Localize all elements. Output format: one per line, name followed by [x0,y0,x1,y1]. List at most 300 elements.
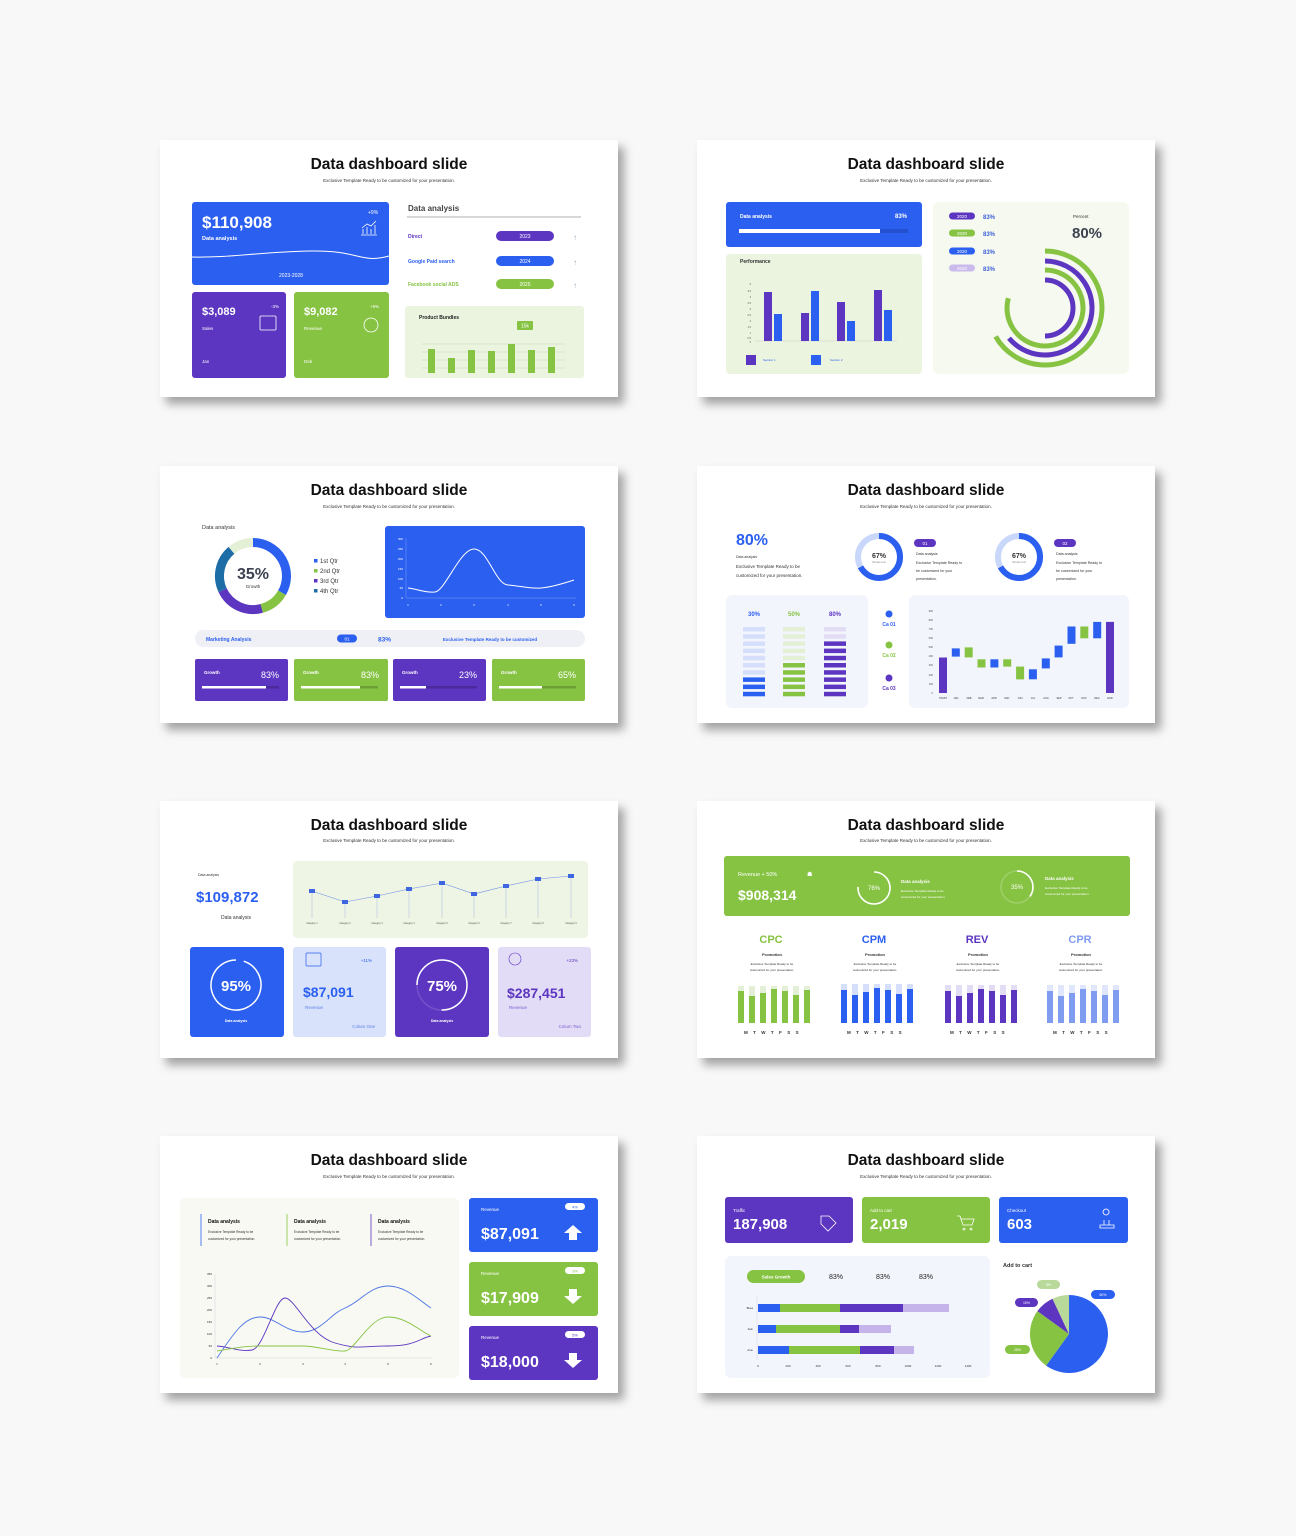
title: Data dashboard slide [848,817,1005,834]
card: traffic: 187,908 [733,1216,787,1233]
title: Exclusive Template Ready to be customized for your presentation. [323,178,455,183]
line chart panel: Category 6 [468,922,480,925]
waterfall chart: 800 [929,618,934,622]
donut 01: 67% [872,553,887,560]
waterfall chart: START [939,697,947,700]
donut 02: 67% [1012,553,1027,560]
panel: multi-line chart: 0 [210,1356,212,1360]
title: Data dashboard slide [311,482,468,499]
panel: performance bar chart: 2 [750,320,752,323]
column: CPR: MTWTFSS [1053,1030,1113,1035]
card: data analysis progress: Data analysis [740,214,772,220]
line chart panel: 200 [398,557,403,561]
card: $87,091: Revenue [305,1005,324,1010]
column: CPC: Exclusive Template Ready to be [751,962,794,966]
card: $87,091 [293,947,386,1037]
waterfall chart: AUG [1043,697,1049,700]
column: REV: MTWTFSS [950,1030,1010,1035]
card: sales: Jan [202,359,210,364]
growth cards: 23% [459,670,477,680]
card: revenue down purple: 5% [572,1332,578,1338]
data analysis list: Facebook social ADS [408,282,459,288]
panel: product bundles chart [405,306,584,378]
waterfall chart: SEP [1056,697,1062,700]
card: total revenue: 2023-2028 [279,273,303,279]
waterfall chart: JUN [1018,697,1023,700]
donut 01: 01 [922,541,928,546]
banner: revenue: $908,314 [738,887,797,903]
banner: revenue: 76% [868,886,881,892]
slide 4 [697,466,1155,723]
panel: multi-line chart: 50 [209,1344,212,1348]
panel: product bundles chart: 15k [521,324,530,330]
card: total revenue: Data analysis [202,236,237,242]
title [311,817,468,843]
line chart panel: 150 [398,567,403,571]
panel: multi-line chart: 200 [207,1308,212,1312]
line chart panel: 3 [473,603,475,607]
waterfall chart: END [1107,697,1113,700]
panel: percent radial chart: 83% [983,215,996,221]
panel: sales growth bars: 83% [876,1274,890,1281]
title: Data dashboard slide [311,1152,468,1169]
card: revenue up: 4% [572,1204,578,1210]
stat: 80%: Data analysis [736,555,757,559]
panel: multi-line chart: 1 [216,1362,218,1366]
panel: multi-line chart: 6 [430,1362,432,1366]
card: add to cart: Add to cart [870,1208,893,1213]
line chart panel: 100 [398,577,403,581]
column: CPM [841,934,913,1035]
slide 1 [160,140,618,397]
waterfall chart: 500 [929,645,934,649]
panel: multi-line chart: 300 [207,1284,212,1288]
panel: multi-line chart: Exclusive Template Ready to be [378,1230,424,1234]
legend: 4th Qtr [320,589,338,595]
donut 01 [858,536,962,581]
line chart panel: Category 9 [565,922,577,925]
data analysis list: Direct [408,234,423,240]
title: Data dashboard slide [848,482,1005,499]
line chart panel: 250 [398,547,403,551]
panel: percent radial chart: 80% [1072,225,1102,242]
panel: multi-line chart: 2 [259,1362,261,1366]
panel: sales growth bars: 1400 [965,1364,972,1368]
line chart panel: Category 2 [339,922,351,925]
title: Data dashboard slide [311,817,468,834]
card: 95% [190,947,284,1037]
stat: $109,872 [196,873,259,921]
donut chart: growth: 35% [237,566,269,583]
panel: product bundles chart: Product Bundles [419,315,459,321]
card: revenue: $9,082 [304,306,338,318]
panel: percent radial chart: 83% [983,232,996,238]
donut chart: growth: Data analysis [202,525,235,531]
panel: multi-line chart [180,1198,459,1378]
marketing analysis bar: Exclusive Template Ready to be customized [443,637,537,642]
slide 7 [160,1136,618,1393]
panel: sales growth bars: 1200 [935,1364,942,1368]
data analysis list: 2025 [519,282,531,288]
waterfall chart [909,595,1129,708]
title [848,482,1005,509]
column: CPR: CPR [1068,934,1092,946]
waterfall chart: NOV [1081,697,1087,700]
line chart panel: Category 3 [371,922,383,925]
panel: multi-line chart: 150 [207,1320,212,1324]
stat: $109,872: Data analysis [198,873,219,877]
donut 01: Data analysis [916,552,938,556]
panel: percent radial chart: 2020 [957,266,968,271]
title: Exclusive Template Ready to be customized for your presentation. [323,838,455,843]
title: Exclusive Template Ready to be customized for your presentation. [860,838,992,843]
card: checkout: 603 [1007,1216,1032,1233]
stat: $109,872: $109,872 [196,889,259,906]
title [848,817,1005,843]
card: sales [192,292,286,378]
panel: performance bar chart: 3.5 [748,302,752,305]
panel: stacked bars: 30% [748,612,761,618]
card: traffic: Traffic [733,1208,746,1213]
panel: multi-line chart: Data analysis [294,1219,326,1225]
banner: revenue: customized for your presentation. [901,895,946,899]
waterfall chart: 700 [929,627,934,631]
pie chart: add to cart: 5% [1046,1283,1051,1287]
panel: sales growth bars: 83% [829,1274,843,1281]
panel: multi-line chart: Data analysis [378,1219,410,1225]
marketing analysis bar [195,630,585,647]
title [848,156,1005,183]
stat: 80%: Exclusive Template Ready to be [736,564,800,569]
marketing analysis bar: 01 [344,636,350,642]
banner: revenue: Data analysis [1045,876,1074,881]
card: revenue up: Revenue [481,1207,500,1212]
card: data analysis progress: 83% [895,214,908,220]
data analysis list: 2024 [519,259,531,265]
card: traffic [725,1197,853,1243]
title: Exclusive Template Ready to be customized for your presentation. [860,178,992,183]
line chart panel: 5 [540,603,542,607]
growth cards: 83% [361,670,379,680]
title [311,156,468,183]
card: add to cart [862,1197,990,1243]
panel: performance bar chart: 0.5 [748,337,752,340]
line chart panel: 2 [440,603,442,607]
card: $87,091: Colum One [352,1024,375,1029]
card: revenue: +5% [370,304,379,309]
card: add to cart: 2,019 [870,1216,908,1233]
card: revenue: Revenue [304,326,323,331]
column: CPM: Exclusive Template Ready to be [854,962,897,966]
panel: multi-line chart: customized for your presentation. [294,1237,341,1241]
line chart panel: Category 1 [306,922,318,925]
card: sales: $3,089 [202,306,236,318]
column: CPC: MTWTFSS [744,1030,804,1035]
title: Data dashboard slide [848,1152,1005,1169]
banner: revenue: ☗ [807,871,812,878]
growth cards: 83% [261,670,279,680]
panel: sales growth bars: 0 [757,1364,759,1368]
panel: performance bar chart: 5 [750,283,752,286]
card: sales: -3% [271,304,279,309]
title: Exclusive Template Ready to be customized for your presentation. [323,504,455,509]
panel: percent radial chart: Percent [1073,214,1089,219]
column: CPR [1047,934,1119,1035]
line chart panel: 1 [407,603,409,607]
data analysis list: ↑ [573,233,577,242]
legend: categories: Ca 02 [882,653,896,659]
waterfall chart: 100 [929,682,934,686]
legend: 1st Qtr [320,559,338,565]
donut 01: presentation. [916,577,937,581]
card: 75%: 75% [427,978,457,995]
title: Exclusive Template Ready to be customized for your presentation. [860,1174,992,1179]
panel: performance bar chart: Section 2 [830,358,843,362]
donut 02: be customized for your [1056,569,1093,573]
marketing analysis bar: 83% [378,636,391,644]
banner: revenue: Exclusive Template Ready to be [1045,886,1088,890]
card: revenue down green: 3% [572,1268,578,1274]
line chart panel: 0 [401,596,403,600]
panel: performance bar chart: 3 [750,308,752,311]
donut 02: 02 [1062,541,1068,546]
line chart panel: 4 [507,603,509,607]
donut 01: be customized for your [916,569,953,573]
panel: percent radial chart: 2020 [957,214,968,219]
data analysis list: 2023 [519,234,531,240]
column: CPM: customized for your presentation. [853,968,897,972]
column: CPM: MTWTFSS [847,1030,907,1035]
donut 01: Simple text [872,560,886,564]
line chart panel: 50 [400,586,403,590]
panel: performance bar chart: 0 [750,341,752,344]
waterfall chart: 600 [929,636,934,640]
card: revenue up: $87,091 [481,1226,539,1243]
card: sales: Sales [202,326,214,331]
panel: stacked bars: 50% [788,612,801,618]
donut chart: growth [202,525,286,610]
card: 95%: 95% [221,978,251,995]
panel: multi-line chart: customized for your presentation. [208,1237,255,1241]
card: total revenue: +9% [368,210,379,216]
legend [314,559,340,595]
waterfall chart: MAR [978,697,984,700]
slide 8 [697,1136,1155,1393]
panel: sales growth bars: Sales Growth [762,1274,791,1280]
growth cards: 65% [558,670,576,680]
banner: revenue: 35% [1011,885,1024,891]
panel: multi-line chart: 100 [207,1332,212,1336]
donut chart: growth: Growth [246,584,261,589]
panel: performance bar chart: 4 [750,296,752,299]
line chart panel: 6 [573,603,575,607]
data analysis list: Google Paid search [408,259,455,265]
card: $87,091: +11% [361,958,372,963]
donut 02 [998,536,1102,581]
panel: percent radial chart: 2020 [957,231,968,236]
line chart panel: 300 [398,537,403,541]
panel: multi-line chart: Exclusive Template Ready to be [208,1230,254,1234]
panel: multi-line chart: 250 [207,1296,212,1300]
title [311,482,468,509]
panel: sales growth bars [725,1256,990,1378]
banner: revenue: Data analysis [901,879,930,884]
waterfall chart: 200 [929,673,934,677]
panel: performance bar chart: Section 1 [763,358,776,362]
growth cards: Growth [204,670,220,675]
line chart panel: Category 5 [436,922,448,925]
card: revenue down purple [469,1326,598,1380]
card: $287,451: $287,451 [507,985,566,1001]
panel: sales growth bars: 83% [919,1274,933,1281]
column: CPC: CPC [759,934,783,946]
card: revenue down purple: $18,000 [481,1354,539,1371]
pie chart: add to cart: 15% [1023,1301,1030,1305]
stat: 80% [736,532,803,578]
column: CPR: Exclusive Template Ready to be [1060,962,1103,966]
card: revenue: Deb [304,359,313,364]
card: 95%: Data analysis [225,1019,247,1023]
title: Data dashboard slide [311,156,468,173]
stat: $109,872: Data analysis [221,915,252,921]
growth cards: Growth [402,670,418,675]
legend: categories: Ca 03 [882,686,896,692]
data analysis list: ↑ [573,281,577,290]
panel: multi-line chart: Exclusive Template Ready to be [294,1230,340,1234]
panel: multi-line chart: 5 [387,1362,389,1366]
card: $287,451: +23% [566,958,578,963]
panel: sales growth bars: Aine [747,1348,753,1352]
panel: multi-line chart: 4 [344,1362,346,1366]
panel: performance bar chart: 1 [750,332,752,335]
waterfall chart: 0 [932,691,934,695]
panel: multi-line chart: 3 [302,1362,304,1366]
waterfall chart: JAN [954,697,959,700]
data analysis list: Data analysis [408,204,460,213]
legend: categories: Ca 01 [882,622,896,628]
panel: sales growth bars: 200 [785,1364,791,1368]
pie chart: add to cart [1003,1263,1115,1373]
title: Data dashboard slide [848,156,1005,173]
line chart panel: Category 8 [532,922,544,925]
stat: 80%: 80% [736,532,768,549]
column: CPC: Promotion [762,952,783,957]
donut 02: Simple text [1012,560,1026,564]
growth cards: Growth [501,670,517,675]
panel: sales growth bars: Bkea [747,1306,753,1310]
column: CPR: customized for your presentation. [1059,968,1103,972]
card: revenue down green: Revenue [481,1271,500,1276]
banner: revenue [724,856,1130,916]
panel: percent radial chart: 83% [983,267,996,273]
waterfall chart: 300 [929,663,934,667]
panel: sales growth bars: 800 [875,1364,881,1368]
pie chart: add to cart: Add to cart [1003,1263,1032,1269]
waterfall chart: JUL [1031,697,1036,700]
banner: revenue: Revenue + 50% [738,872,777,878]
panel: performance bar chart [726,254,922,374]
panel: performance bar chart: Performance [740,259,771,265]
panel: multi-line chart: customized for your presentation. [378,1237,425,1241]
panel: performance bar chart: 2.5 [748,314,752,317]
pie chart: add to cart: 25% [1014,1348,1021,1352]
panel: multi-line chart: Data analysis [208,1219,240,1225]
waterfall chart: FEB [967,697,972,700]
waterfall chart: 900 [929,609,934,613]
line chart panel: Category 7 [500,922,512,925]
waterfall chart: 400 [929,654,934,658]
column: CPM: Promotion [865,952,886,957]
card: $287,451 [498,947,591,1037]
waterfall chart: DEC [1094,697,1100,700]
panel: percent radial chart: 2020 [957,249,968,254]
donut 01: Exclusive Template Ready to [916,561,962,565]
banner: revenue: customized for your presentation. [1045,892,1090,896]
stat: 80%: customized for your presentation. [736,573,803,578]
card: total revenue [192,202,389,285]
panel: percent radial chart: 83% [983,250,996,256]
card: revenue [294,292,389,378]
line chart panel: Category 4 [403,922,415,925]
column: CPC [738,934,810,1035]
column: REV: customized for your presentation. [956,968,1000,972]
column: CPM: CPM [862,934,886,946]
legend: categories [882,610,896,692]
panel: sales growth bars: 600 [845,1364,851,1368]
donut 02: Exclusive Template Ready to [1056,561,1102,565]
legend: 3rd Qtr [320,579,339,585]
card: checkout: Checkout [1007,1208,1027,1213]
panel: sales growth bars: bain [748,1327,753,1331]
waterfall chart: MAY [1004,697,1010,700]
title [311,1152,468,1179]
panel: stacked bars [726,595,868,708]
card: revenue down purple: Revenue [481,1335,500,1340]
card: $287,451: Revenue [509,1005,528,1010]
column: CPC: customized for your presentation. [750,968,794,972]
donut 02: Data analysis [1056,552,1078,556]
column: REV: REV [966,934,989,946]
card: data analysis progress [726,202,922,247]
card: checkout [999,1197,1128,1243]
growth cards [195,659,585,701]
growth cards: Growth [303,670,319,675]
column: REV [945,934,1017,1035]
marketing analysis bar: Marketing Analysis [206,637,252,643]
slide 5 [160,801,618,1058]
data analysis list [407,204,581,290]
slide 2 [697,140,1155,397]
panel: multi-line chart: 350 [207,1272,212,1276]
pie chart: add to cart: 60% [1099,1293,1107,1297]
title: Exclusive Template Ready to be customized for your presentation. [860,504,992,509]
legend: 2nd Qtr [320,569,340,575]
slide 6 [697,801,1155,1058]
card: 75%: Data analysis [431,1019,453,1023]
column: CPR: Promotion [1071,952,1092,957]
card: $87,091: $87,091 [303,984,354,1000]
card: total revenue: $110,908 [202,213,272,232]
column: REV: Promotion [968,952,989,957]
panel: percent radial chart [933,202,1129,374]
card: $287,451: Colum Two [559,1024,581,1029]
title [848,1152,1005,1179]
waterfall chart: APR [991,697,997,700]
donut 02: presentation. [1056,577,1077,581]
column: REV: Exclusive Template Ready to be [957,962,1000,966]
card: revenue down green: $17,909 [481,1290,539,1307]
line chart panel [385,526,585,618]
